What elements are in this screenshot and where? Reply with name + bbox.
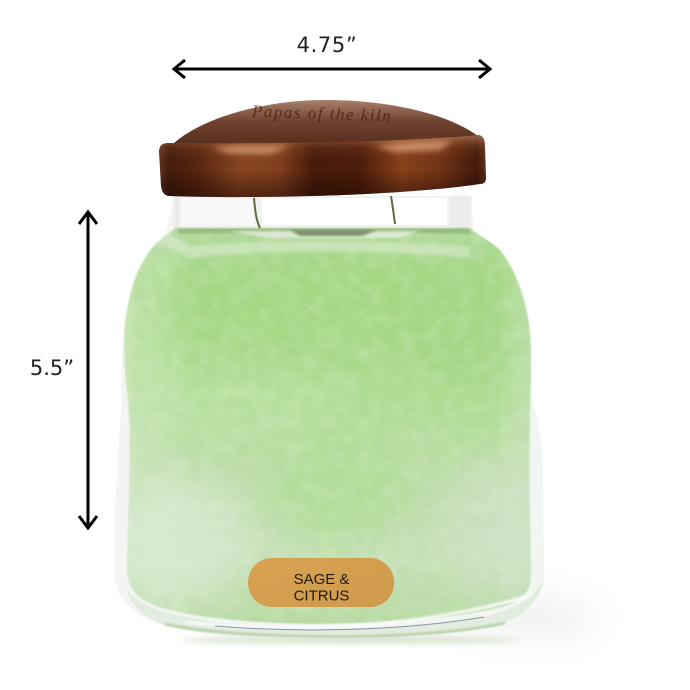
scent label: SAGE & — [294, 571, 349, 588]
jar shadow — [180, 598, 600, 644]
glass base — [127, 578, 544, 638]
height dimension arrow — [79, 212, 97, 528]
lid rim — [159, 135, 486, 197]
neck glass — [174, 196, 472, 234]
glass jar body — [115, 196, 544, 638]
wicks — [254, 196, 395, 228]
candle jar — [115, 196, 544, 638]
scent label — [248, 558, 394, 607]
width label: 4.75” — [297, 33, 357, 57]
lid dome — [172, 100, 478, 152]
height label: 5.5” — [30, 356, 74, 380]
wax — [115, 225, 540, 635]
lid engraving: Papas of the kiln — [251, 102, 393, 125]
copper lid — [159, 100, 486, 197]
scent label: CITRUS — [294, 588, 349, 604]
width dimension arrow — [174, 60, 490, 78]
